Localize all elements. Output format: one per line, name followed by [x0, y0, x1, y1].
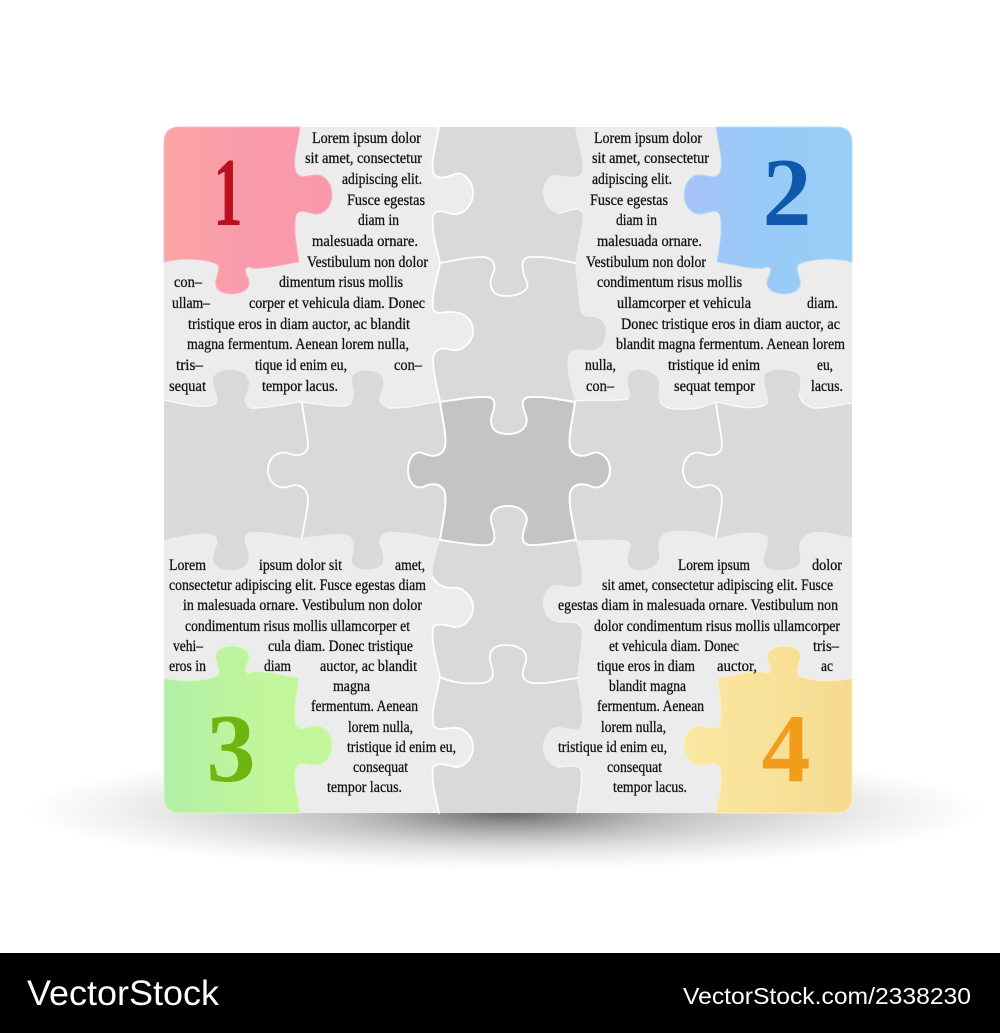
- text block: top-right: condimentum risus mollis: [597, 274, 742, 291]
- text block: bottom-left: [169, 557, 456, 796]
- seam: middle row right: [683, 403, 722, 537]
- text block: bottom-left: cula diam. Donec tristique: [268, 638, 413, 655]
- seam: top-left lower edge: [164, 400, 440, 408]
- text block: top-right: lacus.: [811, 378, 843, 395]
- text block: top-left: tris–: [176, 357, 204, 374]
- text block: bottom-right: tristique id enim eu,: [558, 739, 667, 756]
- text block: bottom-left: diam: [264, 658, 291, 675]
- text block: top-right: blandit magna fermentum. Aenean lorem: [616, 336, 845, 353]
- text block: bottom-left: vehi–: [173, 638, 204, 655]
- text block: bottom-left: condimentum risus mollis ullamcorper et: [185, 618, 410, 635]
- text block: bottom-right: auctor,: [717, 658, 757, 675]
- footer image id: VectorStock.com/2338230: [683, 983, 971, 1009]
- text block: top-right: Donec tristique eros in diam auctor, ac: [621, 316, 840, 333]
- text block: top-left: adipiscing elit.: [342, 171, 422, 188]
- text block: bottom-left: lorem nulla,: [348, 719, 413, 736]
- text block: bottom-right: fermentum. Aenean: [597, 698, 704, 715]
- text block: top-right: Fusce egestas: [590, 192, 668, 209]
- text block: bottom-right: [558, 557, 843, 796]
- text block: bottom-left: eros in: [169, 658, 206, 675]
- panel: top-left light piece: [164, 127, 473, 408]
- text block: bottom-right: ac: [821, 658, 833, 675]
- seam: bottom-left piece edge: [433, 577, 473, 813]
- text block: top-right: malesuada ornare.: [597, 233, 702, 250]
- text block: top-right: sit amet, consectetur: [592, 150, 710, 167]
- text block: bottom-left: ipsum dolor sit: [259, 557, 342, 574]
- text block: bottom-left: consequat: [353, 759, 408, 776]
- seam: upper centre column: [440, 257, 575, 296]
- text block: bottom-left: Lorem: [169, 557, 206, 574]
- text block: bottom-right: tempor lacus.: [613, 779, 687, 796]
- panel: bottom-left light piece: [164, 532, 473, 813]
- seam: top-left piece edge: [433, 127, 473, 401]
- text block: top-right: diam.: [807, 295, 838, 312]
- centre puzzle piece: [408, 397, 610, 545]
- panel: top-right light piece: [543, 127, 852, 409]
- piece 2: blue: [684, 127, 852, 294]
- text block: top-left: Lorem ipsum dolor: [312, 130, 422, 147]
- text block: bottom-right: tris–: [813, 638, 840, 655]
- number 4: 4: [762, 695, 810, 803]
- text block: top-right: Lorem ipsum dolor: [594, 130, 703, 147]
- text block: bottom-right: blandit magna: [609, 678, 686, 695]
- seam: lower centre column: [440, 645, 577, 683]
- text block: top-right: sequat tempor: [674, 378, 756, 395]
- number 3: 3: [206, 695, 256, 803]
- text block: top-left: Fusce egestas: [347, 192, 425, 209]
- text block: top-left: sit amet, consectetur: [305, 150, 423, 167]
- footer logo: VectorStock: [27, 974, 220, 1013]
- text block: top-right: tristique id enim: [668, 357, 760, 374]
- text block: top-right: ullamcorper et vehicula: [617, 295, 751, 312]
- text block: top-left: ullam–: [172, 295, 211, 312]
- text block: bottom-left: fermentum. Aenean: [311, 698, 418, 715]
- piece 4: yellow: [684, 646, 852, 813]
- piece 1: red: [164, 127, 332, 294]
- seam: bottom-right tab lower edges: [558, 622, 581, 813]
- text block: bottom-left: consectetur adipiscing elit. Fusce egestas diam: [169, 577, 426, 594]
- text block: top-right: Vestibulum non dolor: [586, 254, 707, 271]
- text block: bottom-right: consequat: [607, 759, 662, 776]
- text block: top-left: malesuada ornare.: [312, 233, 418, 250]
- text block: top-left: tique id enim eu,: [255, 357, 347, 374]
- text block: bottom-left: amet,: [395, 557, 425, 574]
- text block: top-right: nulla,: [585, 357, 616, 374]
- text block: top-right: adipiscing elit.: [592, 171, 672, 188]
- text block: bottom-left: in malesuada ornare. Vestibulum non dolor: [183, 597, 423, 614]
- text block: bottom-left: tristique id enim eu,: [347, 739, 456, 756]
- text block: bottom-right: lorem nulla,: [601, 719, 666, 736]
- seam: middle row left: [268, 403, 308, 537]
- text block: bottom-right: tique eros in diam: [597, 658, 695, 675]
- text block: top-left: sequat: [169, 378, 207, 395]
- puzzle board: [164, 127, 852, 813]
- text block: top-right: [585, 130, 845, 395]
- grey base: [164, 127, 852, 813]
- text block: bottom-right: egestas diam in malesuada ornare. Vestibulum non: [558, 597, 838, 614]
- panel: bottom-right light piece: [543, 531, 852, 813]
- number 2: 2: [762, 139, 812, 247]
- text block: top-left: tempor lacus.: [262, 378, 338, 395]
- number 1: 1: [213, 139, 243, 247]
- text block: top-right: con–: [586, 378, 615, 395]
- text block: top-left: corper et vehicula diam. Donec: [249, 295, 425, 312]
- text block: bottom-left: magna: [333, 678, 370, 695]
- text block: bottom-right: dolor condimentum risus mollis ullamcorper: [594, 618, 841, 635]
- board shadow: [27, 750, 983, 870]
- text block: bottom-left: auctor, ac blandit: [320, 658, 417, 675]
- footer bar: [0, 953, 1000, 1033]
- text block: top-left: magna fermentum. Aenean lorem nulla,: [187, 336, 409, 353]
- text block: bottom-right: sit amet, consectetur adipiscing elit. Fusce: [602, 577, 833, 594]
- seam: top-right lower edge: [575, 394, 852, 409]
- text block: top-left: tristique eros in diam auctor, ac blandit: [188, 316, 410, 333]
- text block: bottom-right: et vehicula diam. Donec: [609, 638, 739, 655]
- text block: top-left: diam in: [358, 212, 399, 229]
- text block: top-left: [169, 130, 429, 395]
- text block: top-left: con–: [174, 274, 203, 291]
- text block: bottom-left: tempor lacus.: [327, 779, 402, 796]
- text block: top-left: Vestibulum non dolor: [307, 254, 429, 271]
- text block: top-right: diam in: [616, 212, 657, 229]
- piece 3: green: [164, 646, 332, 813]
- text block: bottom-right: Lorem ipsum: [678, 557, 750, 574]
- text block: bottom-right: dolor: [812, 557, 843, 574]
- text block: top-left: con–: [394, 357, 423, 374]
- text block: top-right: eu,: [817, 357, 833, 374]
- seam: top-right tab lower edge: [558, 209, 582, 213]
- text block: top-left: dimentum risus mollis: [279, 274, 403, 291]
